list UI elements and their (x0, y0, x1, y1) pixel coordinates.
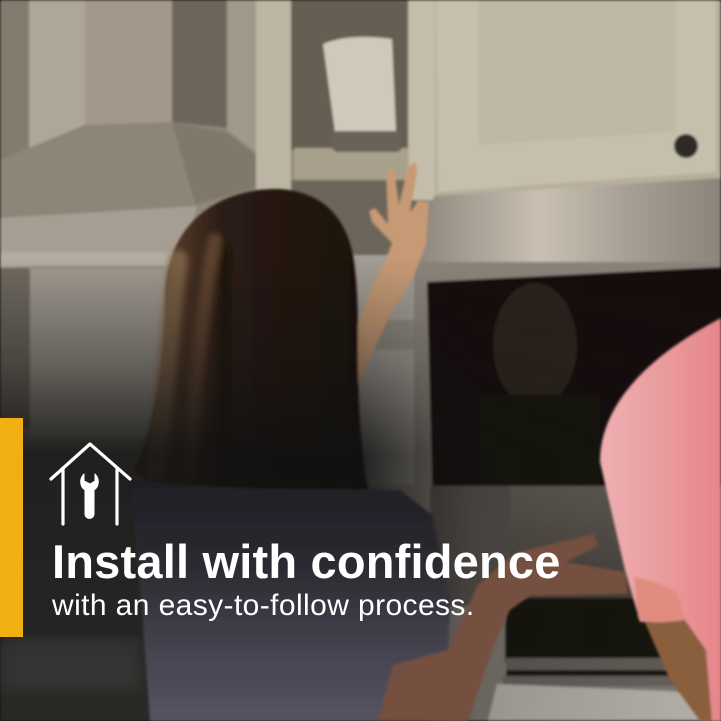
arm and hand (343, 162, 429, 395)
woman torso (130, 482, 628, 721)
person arm (643, 610, 721, 721)
woman hair and raised arm (133, 162, 429, 490)
heading: Install with confidence (52, 535, 561, 588)
second person (600, 318, 721, 721)
pink shirt (600, 318, 721, 721)
bottom-left dark gradient (0, 271, 700, 721)
sleeve hem (634, 577, 686, 622)
near arm (378, 534, 628, 721)
jug (323, 37, 396, 132)
yellow accent bar (0, 418, 23, 637)
shelf (291, 0, 409, 150)
hair (133, 189, 368, 490)
subheading: with an easy-to-follow process. (52, 589, 475, 622)
oven (414, 262, 721, 721)
cabinet (408, 0, 721, 200)
shirt (130, 482, 450, 721)
